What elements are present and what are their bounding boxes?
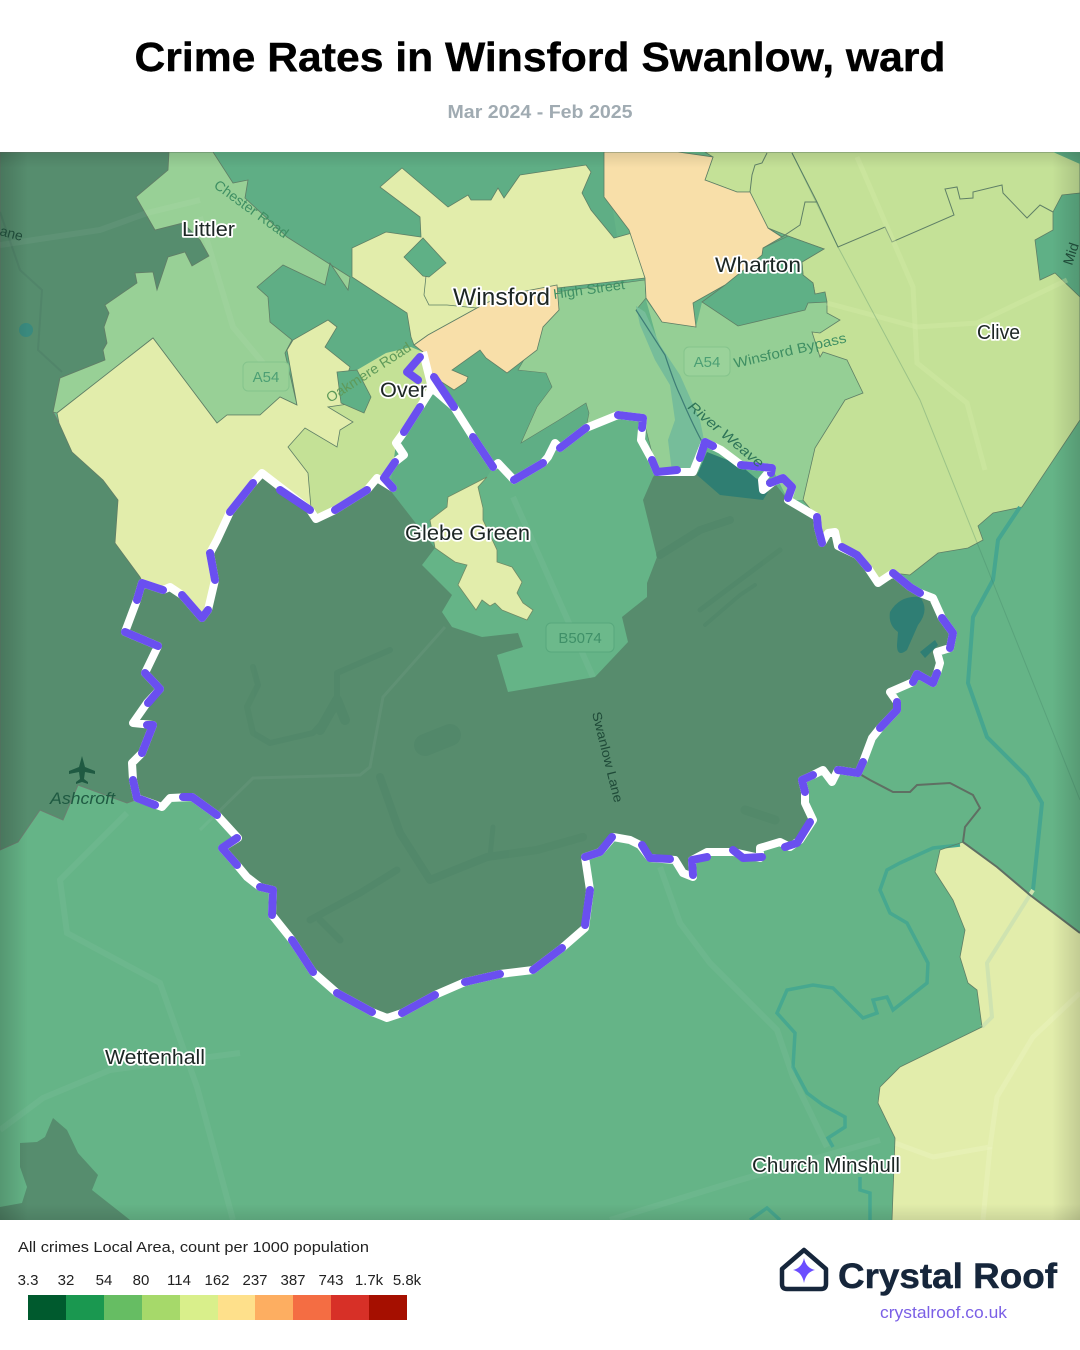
legend tick labels: 743 xyxy=(318,1272,344,1289)
place labels: Winsford xyxy=(453,284,550,311)
road labels: Oakmere Road xyxy=(323,339,414,406)
river: Weaver thin line xyxy=(636,310,705,447)
area: light green east of town centre xyxy=(518,280,675,468)
road labels: Swanlow Lane xyxy=(589,710,626,804)
pale road across the ward xyxy=(200,627,445,830)
place labels xyxy=(105,219,1020,1177)
ward boundary: white line with purple dashes xyxy=(125,352,953,1018)
lake: dark teal east xyxy=(890,597,938,658)
area: dark green south-west blob xyxy=(0,1118,130,1220)
legend tick labels: 1.7k xyxy=(355,1272,384,1289)
area: pale yellow Church Minshull xyxy=(878,842,1080,1220)
area: lime over south xyxy=(288,347,432,519)
road labels: Chester Road xyxy=(211,176,292,241)
area: slightly darker mid-green north xyxy=(170,152,645,480)
west stream and pond xyxy=(0,212,33,337)
legend tick labels: 80 xyxy=(133,1272,149,1289)
area: darker parcel by Over xyxy=(394,449,399,458)
boundary: Church Minshull west edge xyxy=(878,842,982,1220)
area: dark green west xyxy=(0,152,209,850)
map base: mid-green areas xyxy=(0,152,1080,1220)
legend tick labels: 162 xyxy=(204,1272,230,1289)
road shield: B5074: B5074 xyxy=(558,630,602,647)
road shield: A54 east xyxy=(684,347,730,376)
area: orange Wharton xyxy=(604,152,782,327)
title: Crime Rates in Winsford Swanlow, ward xyxy=(134,34,946,80)
road labels: River Weave xyxy=(685,398,768,471)
area: orange Winsford centre xyxy=(414,285,559,390)
website: crystalroof.co.uk xyxy=(880,1304,1008,1322)
icon: plane xyxy=(69,756,95,784)
area: mid-green patch by Oakmere Road xyxy=(337,370,371,413)
area: pale yellow Winsford north xyxy=(352,165,645,345)
roads on Church Minshull area xyxy=(895,993,1080,1220)
roads in Clive xyxy=(826,226,1068,330)
area: Glebe Green yellow xyxy=(430,477,533,620)
legend tick labels: 387 xyxy=(280,1272,306,1289)
place labels: Glebe Green xyxy=(405,522,530,545)
road shield: A54 west: A54 xyxy=(253,369,279,386)
roads: faint pale lines xyxy=(188,1060,794,1073)
choropleth map xyxy=(0,152,1080,1220)
legend colour scale xyxy=(28,1295,407,1320)
boundaries: north-east parcels xyxy=(750,153,1053,247)
road shield: A54 west xyxy=(243,362,289,391)
legend tick labels: 114 xyxy=(167,1272,191,1289)
area: mid-green Wharton south xyxy=(702,236,827,326)
area: mid-green top-right corner xyxy=(1053,152,1080,164)
rail line: thin dark line xyxy=(792,153,1080,800)
road labels: Winsford Bypass xyxy=(732,329,848,371)
legend tick labels: 54 xyxy=(96,1272,112,1289)
area: light green north-west xyxy=(53,152,350,423)
legend tick labels: 3.3 xyxy=(18,1272,38,1289)
area: mid-green hole in Winsford xyxy=(404,238,446,277)
place labels: Wettenhall xyxy=(105,1047,205,1069)
river: south teal xyxy=(750,845,960,1220)
area: mid-green north-east edge xyxy=(1035,193,1080,297)
place labels: Over xyxy=(380,379,427,402)
boundary: dark river line xyxy=(858,773,1080,933)
lake: dark teal by river xyxy=(697,452,768,500)
airfield: Ashcroft: Ashcroft xyxy=(49,789,116,808)
legend tick labels: 32 xyxy=(58,1272,74,1289)
icon: house with star xyxy=(782,1250,826,1289)
legend title: All crimes Local Area, count per 1000 population xyxy=(18,1239,369,1256)
area: river Weaver green strip xyxy=(636,306,705,472)
road shield: B5074 xyxy=(546,623,614,652)
area: pale yellow west xyxy=(57,320,353,618)
legend tick labels xyxy=(18,1272,422,1289)
place labels: Wharton xyxy=(715,254,801,277)
subtitle: date range: Mar 2024 - Feb 2025 xyxy=(448,101,632,122)
road labels: High Street xyxy=(552,276,626,302)
legend tick labels: 5.8k xyxy=(393,1272,422,1289)
edge shading xyxy=(0,152,1080,1220)
place labels: Littler xyxy=(182,219,235,241)
place labels: Clive xyxy=(977,322,1020,344)
river: pale crossing of yellow area xyxy=(982,890,1033,1027)
woodland texture in the ward xyxy=(656,554,657,558)
road shield: A54 east: A54 xyxy=(694,354,720,371)
place labels: Church Minshull xyxy=(752,1155,900,1177)
area: dark green ward interior xyxy=(125,472,953,1018)
legend xyxy=(18,1239,422,1320)
river: east teal xyxy=(968,507,1042,890)
road labels xyxy=(0,176,1080,804)
logo: Crystal Roof xyxy=(782,1250,1057,1322)
Winsford internal boundary xyxy=(424,276,477,308)
logo wordmark: Crystal Roof xyxy=(838,1257,1057,1296)
area: light green east of river xyxy=(646,300,863,500)
legend tick labels: 237 xyxy=(242,1272,268,1289)
airfield: Ashcroft xyxy=(49,756,116,808)
area: lime east, Clive xyxy=(705,152,1080,583)
